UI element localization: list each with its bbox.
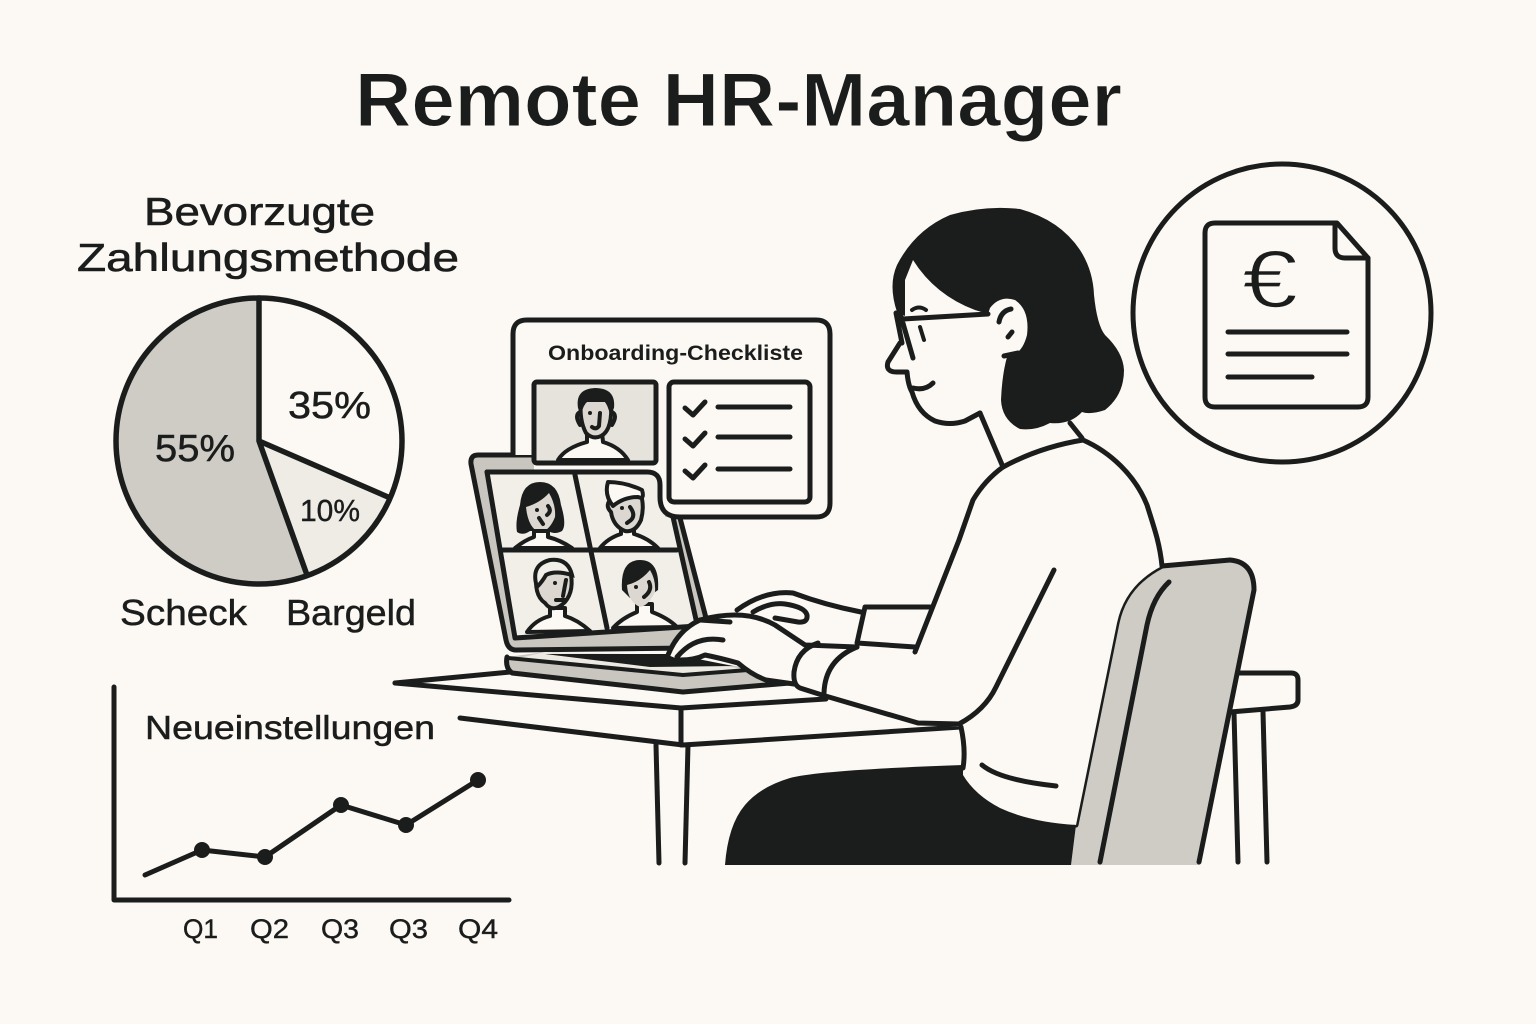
chair [1071, 560, 1254, 865]
quarter labels: Q4 [458, 914, 498, 944]
pie chart: 35% [288, 385, 371, 427]
pie chart: 55% [155, 428, 235, 470]
chart axes [114, 687, 509, 900]
person [725, 208, 1162, 865]
quarter labels: Q3 [389, 914, 428, 944]
back hand [737, 593, 861, 612]
quarter labels: Q3 [321, 914, 359, 944]
participant 1 [515, 482, 572, 548]
sweater outline [915, 440, 1162, 652]
back cuff [857, 607, 930, 647]
pie legend labels: Scheck [120, 592, 248, 633]
pie chart [114, 298, 402, 584]
neck [980, 413, 1082, 467]
sweater torso [794, 440, 1162, 825]
face profile [887, 343, 980, 424]
front cuff [794, 643, 822, 695]
desk [395, 672, 1298, 863]
panel: new hires line chart [114, 687, 509, 944]
quarter labels [183, 914, 498, 944]
brow and eye [912, 308, 926, 340]
divider lines [503, 475, 677, 628]
hands and cuffs [668, 593, 930, 695]
data line with points [145, 772, 486, 875]
heading: preferred payment method: Zahlungsmethode [77, 237, 459, 280]
pie legend labels: Bargeld [286, 592, 416, 633]
laptop lid [470, 455, 716, 650]
laptop with video call [470, 455, 792, 692]
front hand [700, 615, 857, 647]
hair [892, 208, 1124, 429]
chart heading: Neueinstellungen [145, 709, 435, 746]
panel heading: Onboarding-Checkliste [548, 342, 803, 365]
title: Remote HR-Manager [355, 58, 1122, 143]
panel: payment method pie chart [77, 191, 459, 633]
quarter labels: Q2 [250, 914, 289, 944]
screen [487, 472, 697, 638]
video tile [534, 382, 656, 463]
heading: preferred payment method: Bevorzugte [144, 191, 375, 234]
glasses [896, 313, 988, 358]
trousers [725, 765, 1076, 865]
laptop base [507, 652, 792, 692]
panel: onboarding checklist [487, 320, 830, 517]
pie chart: 10% [300, 493, 360, 528]
quarter labels: Q1 [183, 914, 218, 944]
participant 4 [613, 560, 677, 628]
ear detail [999, 309, 1018, 356]
pie legend labels [120, 592, 416, 633]
checklist box [669, 382, 810, 502]
heading: preferred payment method [77, 191, 459, 280]
participant 2 [600, 482, 658, 548]
participant 3 [527, 560, 590, 632]
icon: invoice with euro in circle: € [1242, 234, 1298, 325]
icon: invoice with euro in circle [1133, 164, 1431, 462]
